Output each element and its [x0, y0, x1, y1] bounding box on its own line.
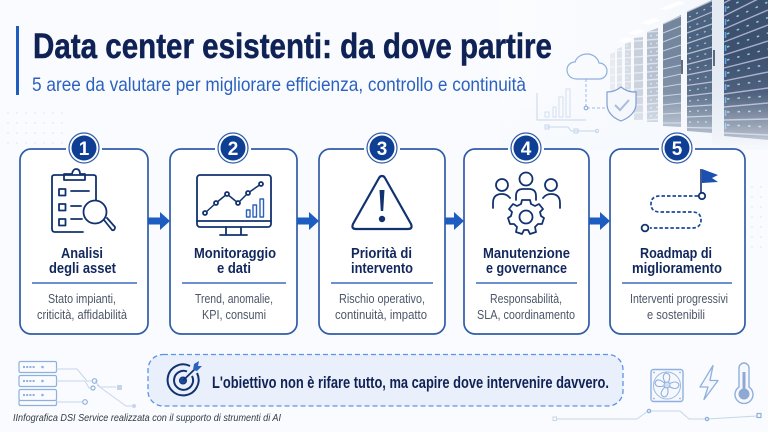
badge 1	[69, 133, 99, 163]
description: Stato impianti,	[48, 292, 116, 306]
description: Interventi progressivi	[630, 292, 728, 306]
footer credit: IInfografica DSI Service realizzata con il supporto di strumenti di AI	[13, 412, 281, 424]
callout text: L'obiettivo non è rifare tutto, ma capire dove intervenire davvero.	[212, 374, 609, 392]
icon: cooling fan	[651, 370, 683, 402]
badge 4: 4	[521, 139, 532, 160]
arrow 2 to 3	[297, 212, 319, 230]
description: continuità, impatto	[335, 308, 427, 322]
heading: Monitoraggio	[194, 245, 276, 262]
badge 1: 1	[79, 139, 90, 160]
server room photo	[500, 0, 768, 150]
heading: e dati	[217, 260, 251, 277]
icon: team with gear	[493, 172, 560, 234]
heading: Manutenzione	[483, 245, 570, 262]
divider	[331, 282, 433, 284]
heading: Priorità di	[351, 245, 412, 262]
description: criticità, affidabilità	[37, 308, 127, 322]
badge 3	[367, 133, 397, 163]
dot pattern top-left	[7, 112, 63, 144]
description: Trend, anomalie,	[195, 292, 273, 306]
description: SLA, coordinamento	[477, 308, 575, 322]
arrow 1 to 2	[148, 212, 170, 230]
server stack line art	[19, 362, 136, 408]
badge 5	[662, 133, 692, 163]
card 4: manutenzione e governance	[464, 133, 589, 334]
heading: degli asset	[49, 260, 116, 277]
description: Responsabilità,	[490, 292, 562, 306]
cloud, shield and chart line art	[537, 54, 636, 133]
badge 4	[511, 133, 541, 163]
dot pattern right	[751, 186, 762, 248]
arrow 4 to 5	[589, 212, 610, 230]
heading: e governance	[486, 260, 567, 277]
icon: lightning bolt	[700, 366, 718, 400]
description: e sostenibili	[647, 308, 705, 322]
icon: monitor with chart	[197, 175, 271, 235]
title accent bar	[16, 26, 19, 95]
badge 2	[218, 133, 248, 163]
icon: target with arrow	[168, 361, 202, 395]
badge 5: 5	[672, 139, 683, 160]
description: KPI, consumi	[202, 308, 266, 322]
icon: warning triangle	[352, 176, 412, 229]
subtitle: 5 aree da valutare per migliorare efficienza, controllo e continuità	[32, 74, 526, 96]
title: Data center esistenti: da dove partire	[33, 27, 552, 66]
card 3: priorità di intervento	[319, 133, 445, 334]
description: Rischio operativo,	[339, 292, 425, 306]
callout banner	[148, 354, 623, 406]
heading: intervento	[351, 260, 413, 277]
card 2: monitoraggio e dati	[170, 133, 297, 334]
card 1: analisi degli asset	[20, 133, 148, 334]
divider	[32, 282, 137, 284]
icon: roadmap path with flag	[642, 169, 718, 231]
arrow 3 to 4	[445, 212, 464, 230]
title block	[16, 26, 552, 96]
icon: clipboard with magnifier	[52, 169, 115, 232]
divider	[476, 282, 577, 284]
circuit line art	[553, 409, 761, 421]
heading: Analisi	[61, 245, 103, 262]
badge 3: 3	[377, 139, 387, 160]
heading: miglioramento	[632, 260, 722, 277]
card 5: roadmap di miglioramento	[610, 133, 745, 334]
badge 2: 2	[228, 139, 238, 160]
heading: Roadmap di	[640, 245, 712, 262]
divider	[182, 282, 286, 284]
icon: thermometer	[735, 363, 753, 403]
divider	[622, 282, 732, 284]
